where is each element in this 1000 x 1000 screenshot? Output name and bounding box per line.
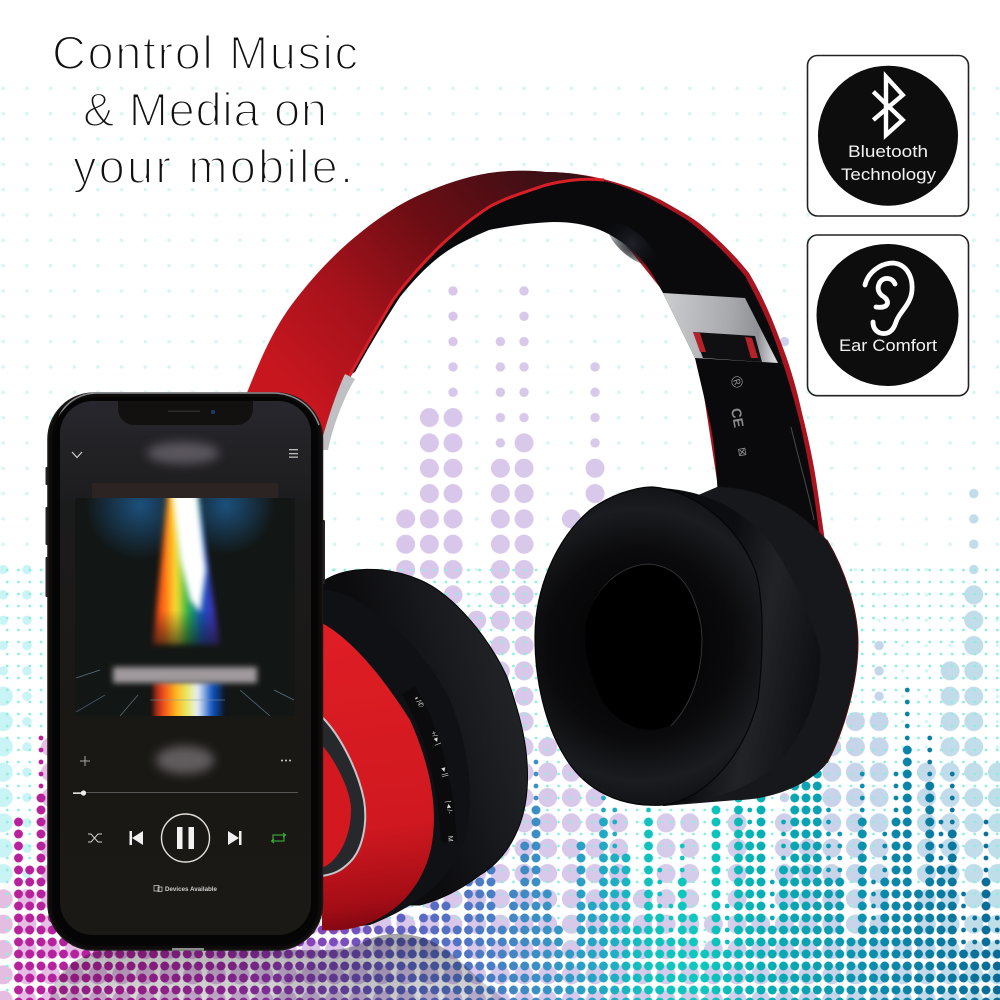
- icon: chevron down: [72, 452, 82, 458]
- icon: queue list: [289, 449, 298, 458]
- regulatory marks: CE: [728, 407, 747, 429]
- phone body: [48, 393, 322, 950]
- headband: silver slider: [663, 293, 778, 363]
- icon: ear: [865, 263, 912, 334]
- headband: black underside and arm: [345, 180, 821, 545]
- phone inner bezel: [52, 397, 318, 946]
- album art: [75, 490, 295, 720]
- heading: [52, 26, 358, 193]
- headband: bright inner edge: [333, 179, 604, 411]
- left cup: button strip: [408, 690, 449, 842]
- headband: slider notch: [693, 332, 762, 362]
- phone screen: [60, 401, 311, 935]
- progress bar: [73, 790, 298, 796]
- blurred playlist title: [147, 442, 219, 464]
- left cup: silver inner ring: [322, 717, 365, 876]
- icon: add: [80, 756, 90, 766]
- icon: repeat: [272, 833, 286, 843]
- blurred track title: [156, 746, 214, 774]
- smartphone: [46, 393, 325, 950]
- label: Bluetooth Technology: Bluetooth: [848, 142, 928, 161]
- bar above album: [92, 483, 278, 498]
- left cup: button labels: ►||: [439, 766, 449, 778]
- icon: bluetooth: [873, 77, 903, 135]
- heading: & Media on: [83, 83, 327, 136]
- fine cyan dot grid: [0, 564, 1000, 1000]
- rainbow foreground equalizer bars: [14, 688, 1000, 1000]
- badge: Ear Comfort: [808, 235, 968, 396]
- phone notch: [118, 401, 253, 425]
- right cup: outer shell: [640, 487, 858, 806]
- icon: next: [228, 831, 242, 845]
- heading: Control Music: [52, 26, 358, 79]
- label: Bluetooth Technology: Technology: [841, 165, 937, 184]
- heading: your mobile.: [73, 140, 353, 193]
- left ear cup: [322, 569, 528, 930]
- right cup: cushion face: [535, 487, 762, 805]
- left cup: button labels: ◐/✆: [412, 695, 426, 709]
- headband: thin red outer edge on right side: [546, 172, 826, 548]
- regulatory marks: ®: [726, 374, 746, 391]
- devices available: [154, 886, 218, 893]
- icon: pause button: [162, 814, 210, 862]
- regulatory marks: [726, 374, 748, 458]
- left cup: cushion: [322, 569, 528, 905]
- headphones: [240, 171, 858, 930]
- left cup: button labels: [412, 695, 454, 842]
- icon: more options: [281, 760, 291, 762]
- left cup: inner red: [322, 745, 351, 868]
- charging port reflection: [172, 948, 204, 950]
- phone speaker: [168, 410, 200, 412]
- headband: left silver slider: [319, 374, 355, 450]
- right ear cup: [535, 487, 858, 806]
- phone top silver edge: [57, 393, 319, 425]
- left cup: black rim: [322, 590, 470, 930]
- label: Bluetooth Technology: [841, 142, 937, 184]
- phone camera: [211, 410, 215, 414]
- left cup: button labels: +/►|: [429, 730, 441, 747]
- right cup: stitching: [586, 564, 702, 726]
- phone side buttons: [46, 467, 325, 597]
- right cup: inner opening: [585, 565, 701, 730]
- left cup: button labels: M: [446, 836, 454, 842]
- lavender equalizer bars: [0, 286, 1000, 1000]
- headband: red outer surface: [240, 171, 606, 450]
- label: Ear Comfort: Ear Comfort: [839, 336, 937, 355]
- icon: previous: [130, 831, 143, 845]
- regulatory marks: ⊠: [735, 446, 748, 458]
- headband: red slider tabs: [693, 332, 758, 358]
- headband: underside shine: [601, 216, 663, 272]
- right cup: red hairline: [827, 540, 858, 763]
- icon: shuffle: [88, 834, 102, 842]
- badge: Bluetooth Technology: [808, 56, 968, 216]
- right cup: cushion side: [660, 488, 820, 806]
- headband: arm highlight line: [791, 427, 814, 520]
- left cup: button labels: |◄/-: [444, 800, 453, 815]
- left cup: red leather plate: [322, 623, 434, 930]
- reflection of headphones and phone: [50, 934, 505, 1000]
- devices available: Devices Available: [165, 887, 218, 893]
